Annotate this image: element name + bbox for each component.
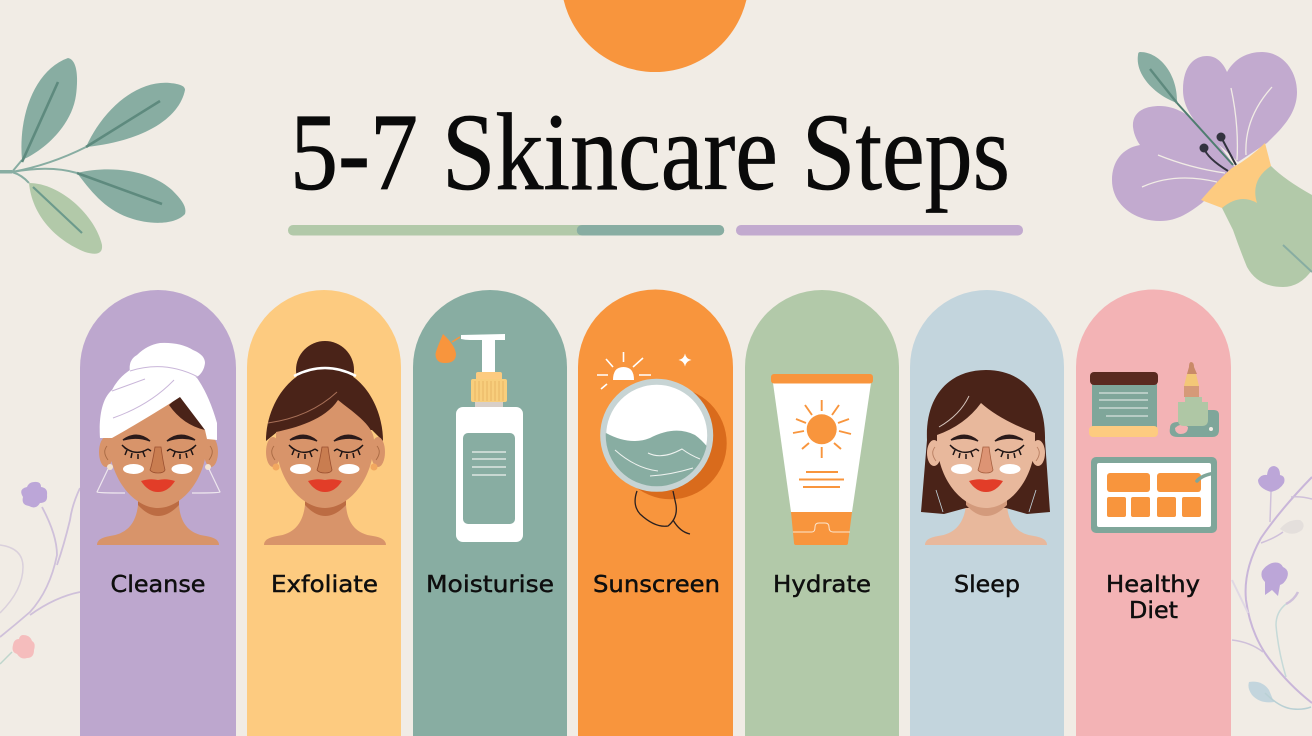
label: Exfoliate: Exfoliate — [271, 572, 378, 598]
panel: Cleanse — [80, 290, 236, 736]
panel: Healthy Diet — [1076, 289, 1231, 736]
label: Healthy Diet: Diet — [1129, 598, 1178, 624]
panel: Exfoliate — [247, 290, 401, 736]
panel: Sunscreen — [578, 290, 733, 736]
icon: face with hair bun — [264, 341, 386, 545]
flower top right — [1112, 52, 1312, 287]
label: Moisturise: Moisturise — [426, 572, 554, 598]
vine bottom right — [1232, 466, 1312, 709]
icon: mirror — [600, 382, 727, 534]
icon: sunscreen tube — [771, 374, 873, 545]
sun semicircle — [561, 0, 749, 72]
label: Sunscreen: Sunscreen — [593, 572, 720, 598]
label: Healthy Diet: Healthy — [1106, 572, 1200, 598]
icon: jar — [1089, 372, 1158, 437]
icon: sun and star — [597, 352, 692, 389]
label: Sleep: Sleep — [954, 572, 1020, 598]
panel: Sleep — [910, 290, 1064, 736]
icon: face with towel — [97, 343, 220, 545]
title: 5-7 Skincare Steps — [290, 91, 1010, 213]
panel: Moisturise — [413, 290, 567, 736]
icon: face with bob hair — [921, 370, 1050, 545]
title underline bars — [288, 225, 1023, 236]
icon: meal tray — [1091, 457, 1217, 533]
panel: Hydrate — [745, 290, 899, 736]
icon: small bottle — [1170, 362, 1219, 437]
label: Hydrate: Hydrate — [773, 572, 871, 598]
icon: pump bottle — [436, 334, 523, 542]
vine bottom left — [0, 482, 80, 664]
label: Cleanse: Cleanse — [110, 572, 206, 598]
label: Healthy Diet — [1106, 572, 1200, 624]
leaf sprig top left — [0, 58, 185, 254]
